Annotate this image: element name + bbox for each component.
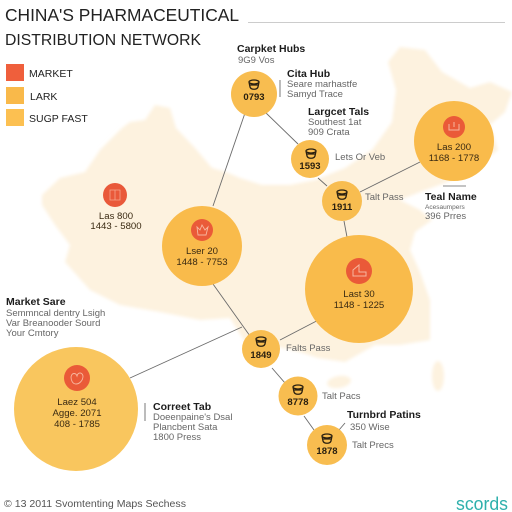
legend: SUGP FAST — [29, 113, 88, 125]
label: city hub: Cita Hub — [287, 68, 330, 80]
label: connect tab: Plancbent Sata — [153, 422, 218, 433]
label: largest tab — [308, 106, 369, 138]
title: DISTRIBUTION NETWORK — [5, 32, 202, 49]
label: turnbrd patins — [347, 409, 421, 433]
connector lines — [130, 80, 466, 430]
label: carpet hubs: 9G9 Vos — [238, 55, 275, 66]
title — [5, 5, 239, 49]
node: 1911: 1911 — [332, 202, 353, 213]
label: team name: 396 Prres — [425, 211, 466, 222]
label: turnbrd patins: 350 Wise — [350, 422, 390, 433]
label: talt pass: Talt Pass — [365, 192, 404, 203]
node: 1911 — [322, 181, 362, 221]
label: connect tab: Correet Tab — [153, 401, 211, 413]
legend: LARK — [30, 91, 57, 103]
label: carpet hubs — [237, 43, 305, 66]
node: 1878: 1878 — [316, 446, 338, 457]
label: turnbrd patins: Turnbrd Patins — [347, 409, 421, 421]
node: capital hub: 0793 — [243, 92, 265, 103]
node: north-east market: 1168 - 1778 — [429, 153, 479, 164]
node: western market: 1443 - 5800 — [90, 221, 142, 232]
node: 1593: 1593 — [299, 161, 321, 172]
text: market share: Semmncal dentry Lsigh — [6, 308, 105, 319]
text: market share: Var Breanooder Sourd — [6, 318, 100, 329]
node: bottom-left large market: 408 - 1785 — [54, 419, 100, 430]
label: connect tab — [153, 401, 232, 443]
text: market share — [6, 296, 105, 339]
node: mid-west market: 1448 - 7753 — [176, 257, 228, 268]
node: large central market — [305, 235, 413, 343]
node: 8778 — [278, 376, 318, 416]
node: bottom-left large market — [14, 347, 138, 471]
node: 8778: 8778 — [287, 397, 309, 408]
node: capital hub — [231, 71, 277, 117]
node: 1849 — [242, 330, 280, 368]
node: western market: Las 800 — [99, 211, 133, 222]
text: market share: Your Cmtory — [6, 328, 59, 339]
label: city hub — [287, 68, 357, 100]
node: 1849: 1849 — [250, 350, 272, 361]
label: team name: Acesaumpers — [425, 204, 465, 211]
text: market share: Market Sare — [6, 296, 66, 308]
label: faits pass: Falts Pass — [286, 343, 331, 354]
label: largest tab: Largcet Tals — [308, 106, 369, 118]
label: talt precs: Talt Precs — [352, 440, 394, 451]
title: CHINA'S PHARMACEUTICAL — [5, 5, 239, 25]
label: lets or veb: Lets Or Veb — [335, 152, 385, 163]
label: talt pacs: Talt Pacs — [322, 391, 361, 402]
label: team name — [425, 191, 477, 222]
node: 1593 — [291, 140, 329, 178]
node: large central market: 1148 - 1225 — [334, 300, 384, 311]
label: largest tab: Southest 1at — [308, 117, 362, 128]
node: 1878 — [307, 425, 347, 465]
map of China — [42, 47, 512, 391]
node: bottom-left large market: Laez 504 — [57, 397, 97, 408]
node: mid-west market — [162, 206, 242, 286]
legend — [6, 64, 88, 126]
label: largest tab: 909 Crata — [308, 127, 350, 138]
node: north-east market: Las 200 — [437, 142, 471, 153]
footer: © 13 2011 Svomtenting Maps Sechess — [4, 499, 186, 510]
label: city hub: Seare marhastfe — [287, 79, 357, 90]
label: city hub: Samyd Trace — [287, 89, 343, 100]
label: carpet hubs: Carpket Hubs — [237, 43, 305, 55]
node: north-east market — [414, 101, 494, 181]
node: western market — [90, 183, 142, 232]
label: connect tab: Doeenpaine's Dsal — [153, 412, 232, 423]
label: team name: Teal Name — [425, 191, 477, 203]
legend: MARKET — [29, 68, 73, 80]
node: large central market: Last 30 — [343, 289, 375, 300]
node: mid-west market: Lser 20 — [186, 246, 218, 257]
node: bottom-left large market: Agge. 2071 — [52, 408, 102, 419]
label: connect tab: 1800 Press — [153, 432, 201, 443]
